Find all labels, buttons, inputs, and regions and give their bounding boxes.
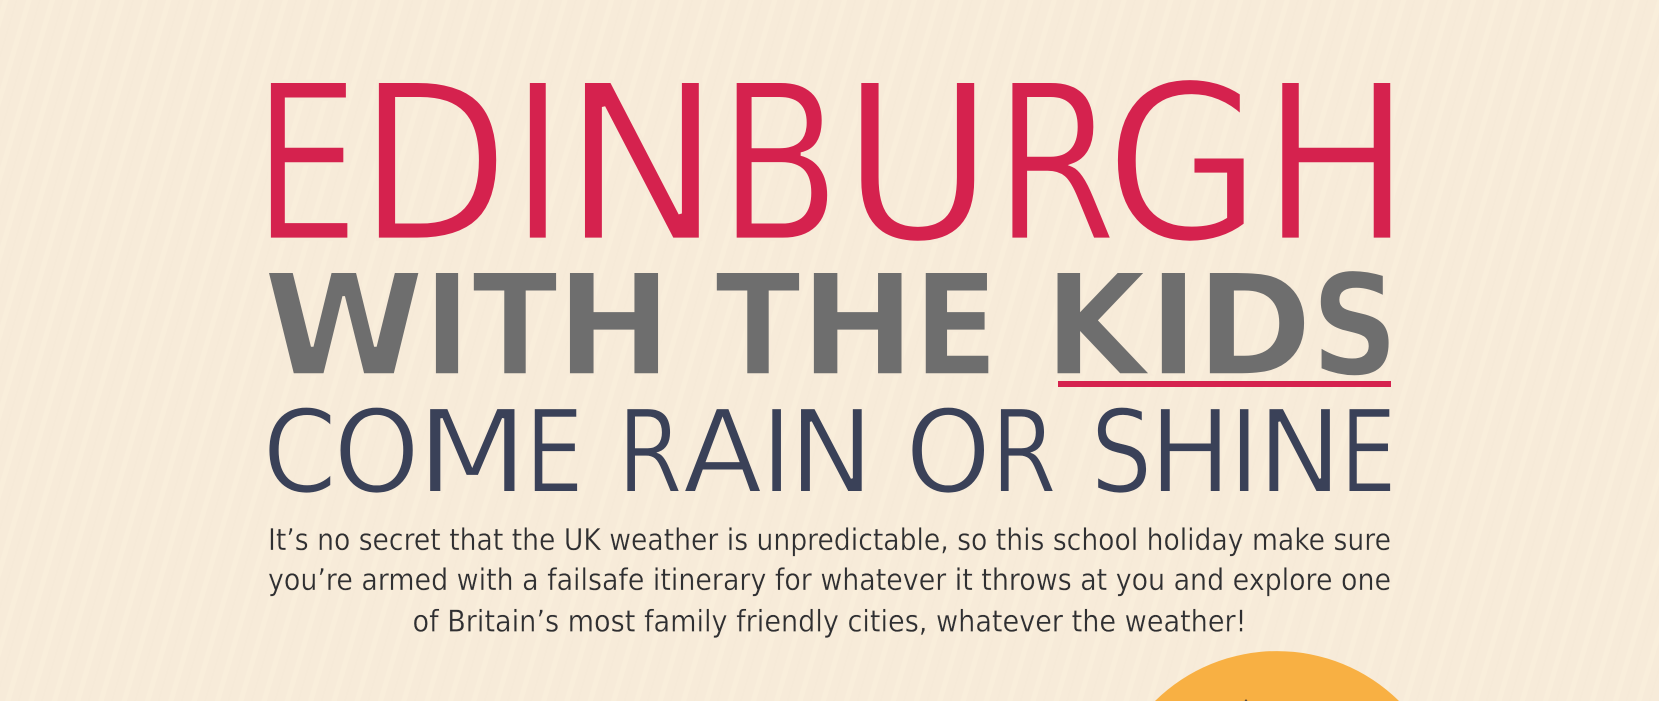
- subtitle: come rain or shine: N: [789, 386, 874, 520]
- title: Edinburgh: D: [358, 39, 509, 291]
- subtitle: come rain or shine: A: [683, 386, 762, 520]
- heading: with the kids: I: [1148, 244, 1199, 408]
- subtitle: come rain or shine: S: [1091, 386, 1152, 520]
- title: Edinburgh: G: [1105, 39, 1262, 291]
- title: Edinburgh: H: [1261, 39, 1412, 291]
- heading: with the kids: I: [423, 244, 471, 408]
- subtitle: come rain or shine: E: [1340, 386, 1397, 520]
- intro paragraph: [268, 523, 1391, 640]
- heading: with the kids: H: [556, 244, 672, 408]
- heading: with the kids: S: [1311, 244, 1399, 408]
- subtitle: come rain or shine: E: [525, 386, 584, 520]
- heading: with the kids: D: [1196, 244, 1313, 408]
- title: Edinburgh: B: [718, 39, 841, 291]
- heading: with the kids: T: [715, 244, 801, 408]
- sun: [1155, 651, 1399, 701]
- intro paragraph: It’s no secret that the UK weather is unpredictable, so this school holiday make sure: [268, 523, 1391, 558]
- underline under kids: [1058, 381, 1391, 387]
- title: Edinburgh: E: [253, 39, 360, 291]
- title: Edinburgh: R: [994, 39, 1117, 291]
- title: Edinburgh: N: [562, 39, 721, 291]
- subtitle: come rain or shine: N: [1257, 386, 1342, 520]
- intro paragraph: of Britain’s most family friendly cities, whatever the weather!: [412, 604, 1246, 640]
- heading: with the kids: W: [263, 244, 425, 408]
- subtitle: come rain or shine: M: [416, 386, 528, 520]
- subtitle: come rain or shine: I: [761, 386, 792, 520]
- subtitle: come rain or shine: I: [1229, 386, 1260, 520]
- intro paragraph: you’re armed with a failsafe itinerary for whatever it throws at you and explore one: [268, 563, 1391, 598]
- subtitle: come rain or shine: C: [262, 386, 337, 520]
- title: Edinburgh: I: [509, 39, 566, 291]
- heading: with the kids: T: [472, 244, 558, 408]
- subtitle: come rain or shine: O: [333, 386, 420, 520]
- subtitle: come rain or shine: R: [991, 386, 1057, 520]
- heading: with the kids: H: [800, 244, 915, 408]
- subtitle: come rain or shine: R: [617, 386, 683, 520]
- title: Edinburgh: U: [842, 39, 994, 291]
- subtitle: come rain or shine: O: [905, 386, 991, 520]
- subtitle: come rain or shine: H: [1149, 386, 1231, 520]
- heading: with the kids: E: [913, 244, 999, 408]
- heading: with the kids: K: [1044, 244, 1151, 408]
